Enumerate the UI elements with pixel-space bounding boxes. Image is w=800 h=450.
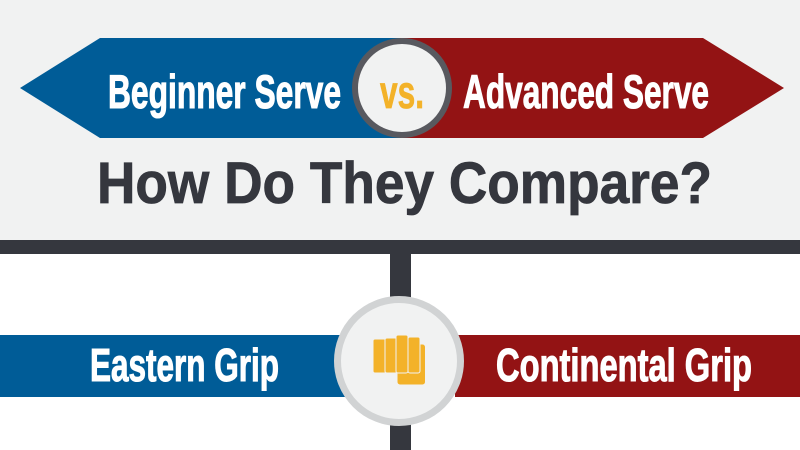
header panel bbox=[0, 0, 800, 254]
vs badge: vs. bbox=[380, 66, 424, 118]
grip circle badge bbox=[338, 300, 460, 422]
right arrow: advanced serve bbox=[400, 38, 784, 138]
main heading: How Do They Compare? bbox=[97, 151, 712, 216]
vertical connector line bbox=[390, 254, 411, 450]
vs badge bbox=[355, 41, 449, 135]
left arrow: beginner serve: Beginner Serve bbox=[108, 65, 341, 118]
left bar: eastern grip bbox=[0, 335, 345, 397]
left arrow: beginner serve bbox=[20, 38, 400, 138]
icon: fist bbox=[373, 335, 426, 385]
left bar: eastern grip: Eastern Grip bbox=[90, 339, 279, 391]
